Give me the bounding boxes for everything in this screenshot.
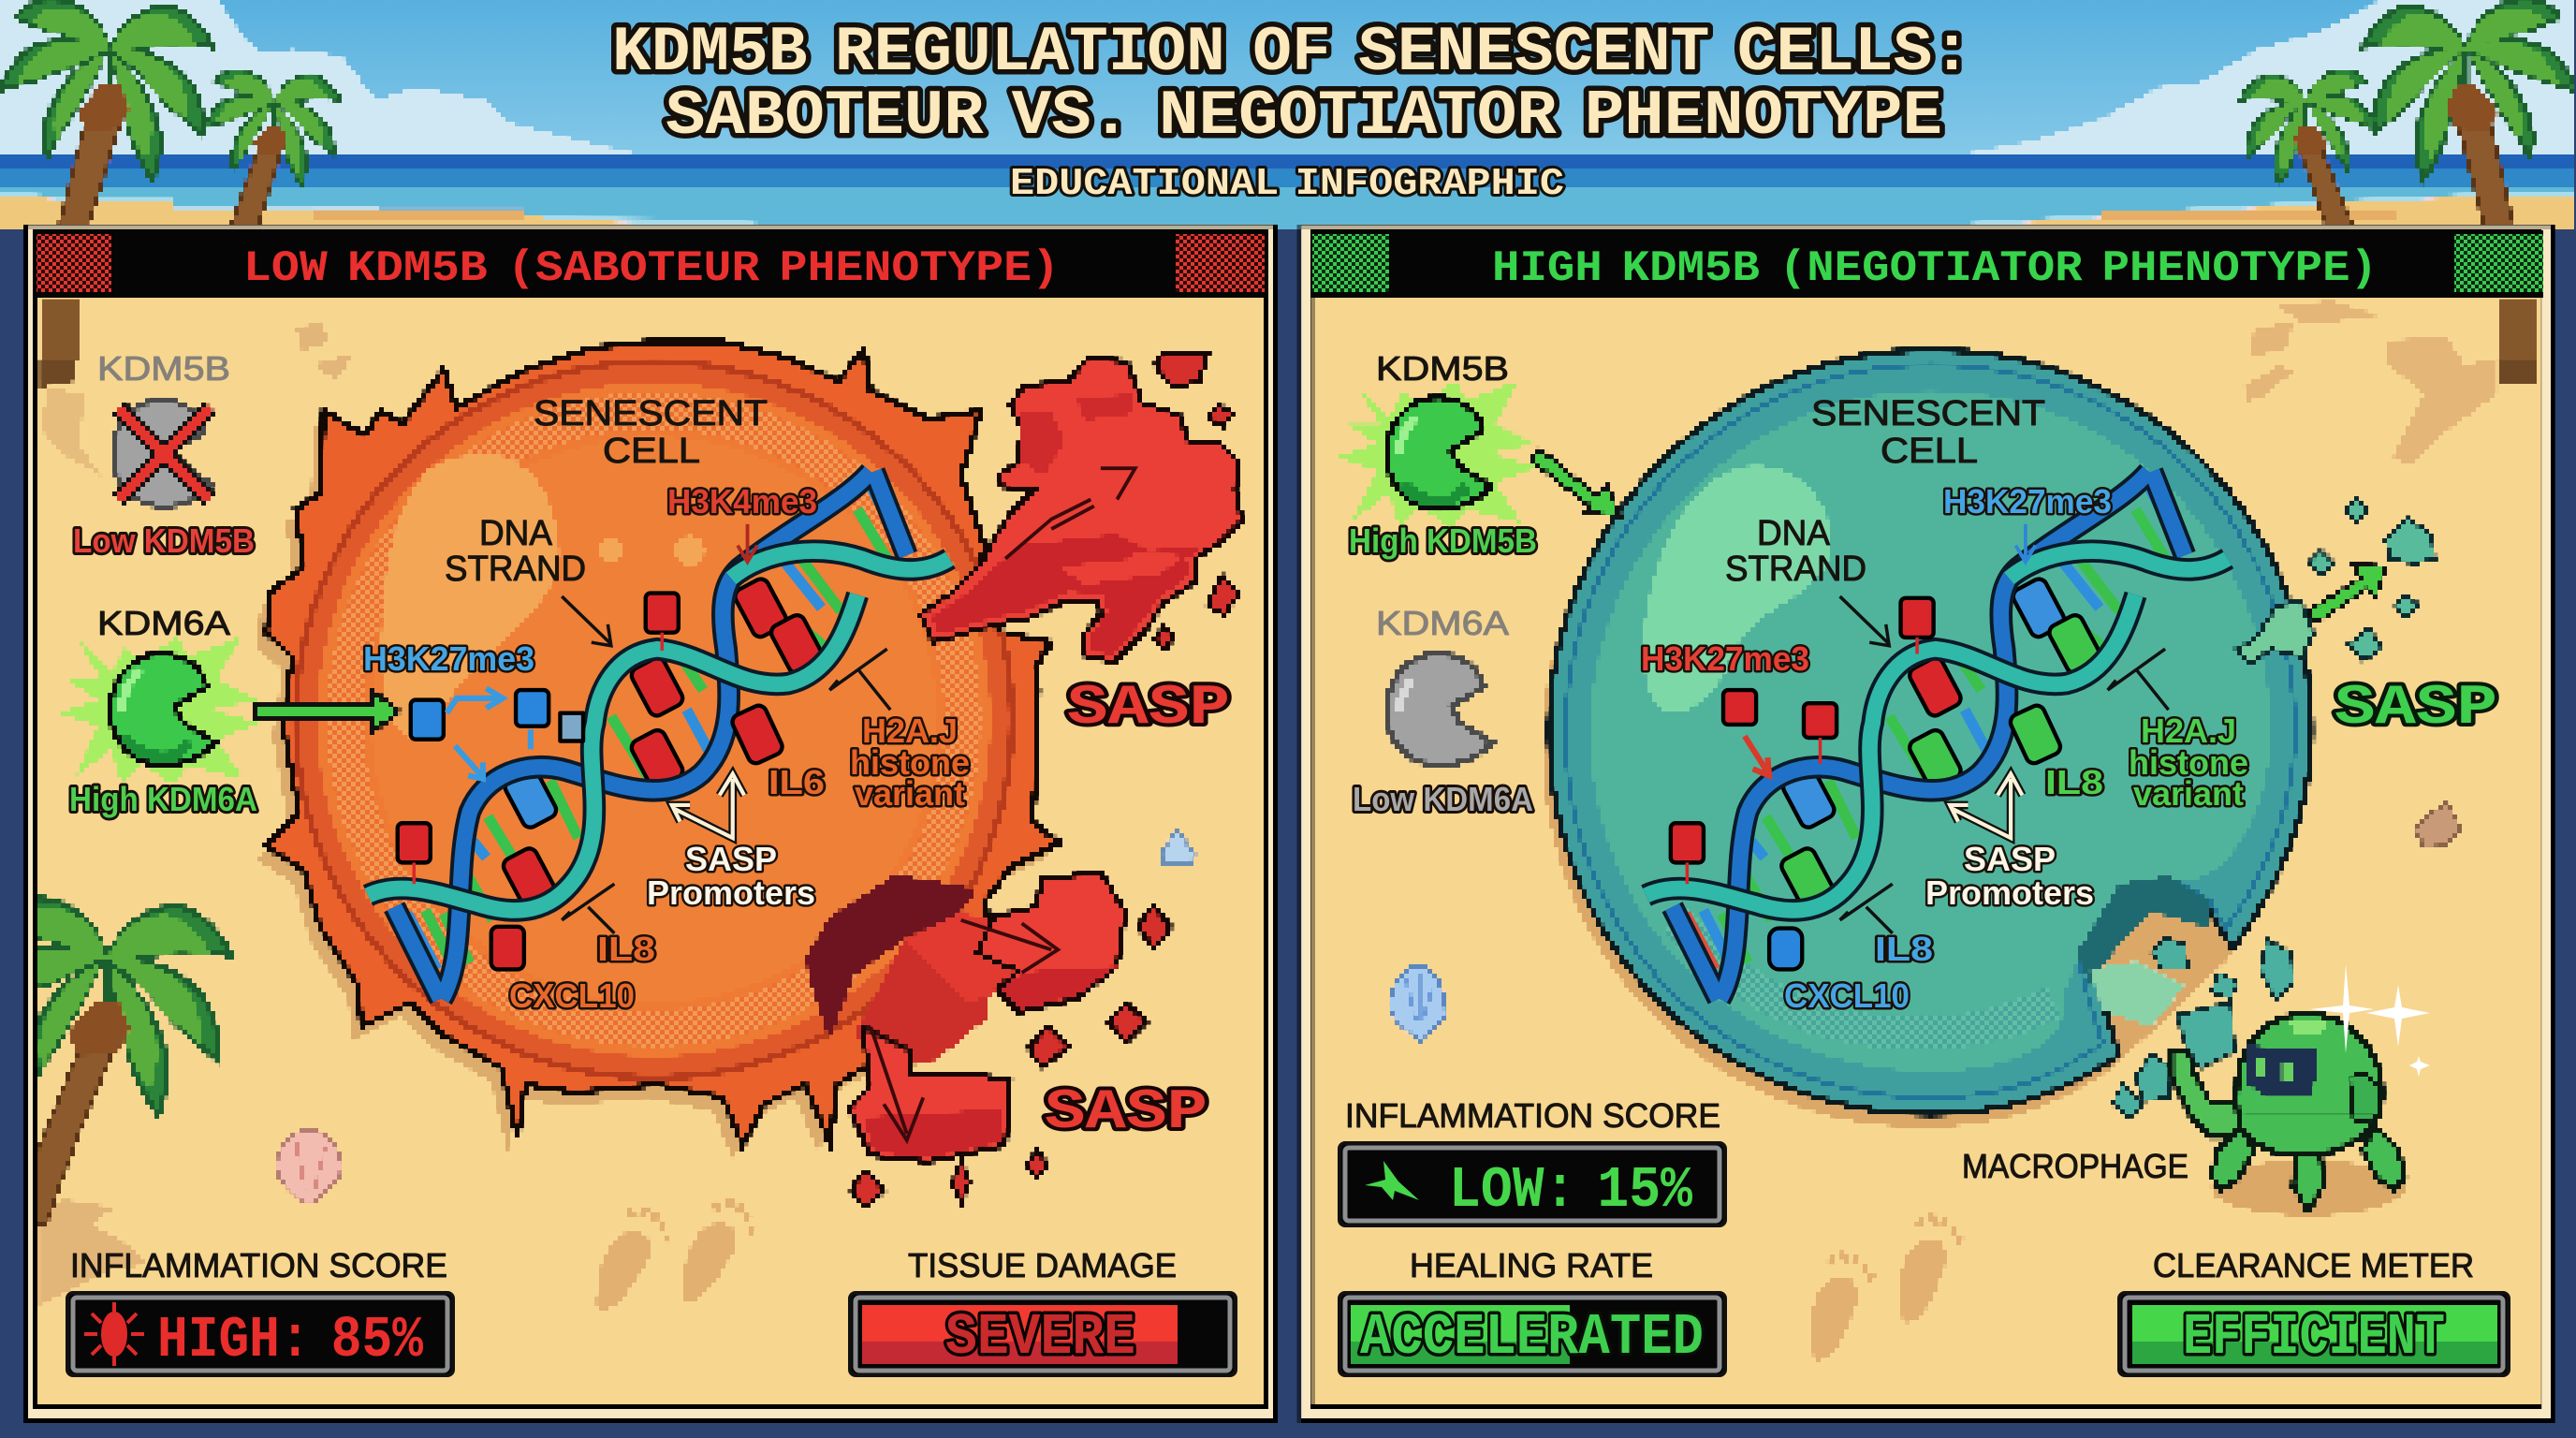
panel frame and sand <box>1301 225 2552 1419</box>
labels inside cell: histone <box>850 743 970 782</box>
promoter arrows <box>1950 774 2022 838</box>
labels inside cell: H3K4me3 <box>667 482 817 521</box>
gauge: inflammation score high: HIGH: 85% <box>157 1307 424 1373</box>
H2A.J bracket <box>829 649 890 710</box>
labels inside cell: IL8 <box>1875 930 1933 968</box>
enzyme: KDM6A high: High KDM6A <box>69 780 257 818</box>
burst arrows <box>871 468 1135 1140</box>
blue pointer <box>2015 524 2035 562</box>
methyl marks: blue and green <box>1769 703 2063 969</box>
senescent cell: spiky orange <box>256 342 1242 1208</box>
enzyme: KDM6A high <box>59 604 399 818</box>
red arrow <box>1745 736 1769 775</box>
title <box>612 17 1971 153</box>
labels inside cell: variant <box>855 774 965 813</box>
labels inside cell: H2A.J <box>2141 712 2236 750</box>
gauge: healing rate <box>1339 1246 1725 1375</box>
enzyme: KDM6A low <box>1353 604 1533 818</box>
labels inside cell: IL6 <box>768 763 825 801</box>
labels inside cell: SASP <box>1964 840 2056 878</box>
SASP burst: lower <box>849 1027 1010 1162</box>
labels inside cell: SENESCENT <box>1811 394 2045 433</box>
enzyme: KDM5B absent <box>73 349 255 560</box>
labels inside cell <box>1641 394 2248 1015</box>
palm: lower left <box>39 1199 148 1306</box>
labels inside cell: STRAND <box>1725 550 1866 589</box>
enzyme: KDM5B high: KDM5B <box>1376 349 1509 388</box>
macrophage robot <box>2172 1014 2405 1211</box>
icon: inflammation virus <box>84 1302 144 1366</box>
gauge: inflammation score high <box>67 1246 453 1375</box>
labels inside cell: IL8 <box>2045 763 2103 801</box>
gauge: clearance meter <box>2119 1246 2509 1375</box>
SASP droplets: top <box>1155 355 1238 649</box>
senescent cell: teal <box>1531 350 2435 1127</box>
notch shade <box>2076 875 2209 986</box>
fragments <box>2089 961 2185 1027</box>
labels inside cell: CXCL10 <box>509 976 635 1015</box>
labels inside cell: DNA <box>479 514 553 553</box>
shell: blue <box>1390 966 1445 1042</box>
labels inside cell: STRAND <box>445 550 586 589</box>
labels inside cell: H3K27me3 <box>363 639 534 678</box>
clouds <box>0 0 2576 154</box>
gauge: healing rate: HEALING RATE <box>1410 1246 1653 1284</box>
label: macrophage: MACROPHAGE <box>1962 1147 2188 1185</box>
base pair rungs <box>1686 486 2182 969</box>
footprints <box>585 1192 763 1324</box>
gauge: healing rate: ACCELERATED <box>1360 1304 1704 1371</box>
secretion: small SASP <box>2237 600 2313 666</box>
SASP burst: top right <box>920 359 1242 662</box>
label: SASP bottom: SASP <box>1045 1081 1208 1145</box>
shell: pink <box>276 1130 342 1203</box>
enzyme: KDM5B high <box>1338 349 1538 560</box>
header title: LOW KDM5B (SABOTEUR PHENOTYPE) <box>243 244 1060 293</box>
IL8 bracket <box>562 884 614 933</box>
labels inside cell <box>363 394 970 1015</box>
shell: brown <box>2415 801 2461 848</box>
labels inside cell: H3K27me3 <box>1943 482 2112 521</box>
blue arrows <box>446 688 531 779</box>
gauge: inflammation score high: INFLAMMATION SCORE <box>70 1246 447 1284</box>
sand <box>0 192 2576 230</box>
title: KDM5B REGULATION OF SENESCENT CELLS: <box>612 17 1971 89</box>
panel: high KDM5B negotiator phenotype <box>1301 225 2552 1419</box>
macrophage shadow <box>2211 1160 2405 1216</box>
sea <box>0 154 2576 230</box>
sparkles <box>2310 964 2430 1077</box>
DNA double helix <box>1647 472 2228 999</box>
gauge: clearance meter: EFFICIENT <box>2183 1304 2445 1371</box>
enzyme: KDM6A high: KDM6A <box>97 604 230 642</box>
arrow: KDM5B to cell <box>1531 448 1619 516</box>
footprints <box>1803 1211 1967 1369</box>
labels inside cell: H3K27me3 <box>1641 639 1809 678</box>
arrow: secretion <box>2308 564 2385 623</box>
labels inside cell: SENESCENT <box>534 394 768 433</box>
title: SABOTEUR VS. NEGOTIATOR PHENOTYPE <box>666 81 1942 153</box>
panel header bar <box>1310 230 2543 298</box>
palm trunks <box>59 109 2513 225</box>
promoter arrows <box>672 774 744 838</box>
IL8 bracket <box>1840 884 1893 933</box>
labels inside cell: CXCL10 <box>1784 976 1910 1015</box>
labels inside cell: histone <box>2129 743 2248 782</box>
panel: low KDM5B saboteur phenotype <box>0 225 1277 1419</box>
gauge: tissue damage: SEVERE <box>945 1304 1135 1371</box>
DNA pointer <box>562 596 611 646</box>
methyl marks: red <box>398 594 784 969</box>
label: SASP: SASP <box>2334 677 2497 741</box>
label: SASP top: SASP <box>1067 677 1230 741</box>
enzyme: KDM5B high: High KDM5B <box>1349 521 1537 560</box>
labels inside cell: variant <box>2133 774 2244 813</box>
base pair rungs <box>407 486 903 969</box>
gauge: inflammation score low: LOW: 15% <box>1449 1157 1693 1224</box>
methyl marks: red <box>1671 598 1934 884</box>
labels inside cell: DNA <box>1757 514 1831 553</box>
labels inside cell: IL8 <box>597 930 655 968</box>
histone capsules <box>501 576 825 909</box>
gauge: tissue damage: TISSUE DAMAGE <box>908 1246 1177 1284</box>
panel frame and sand <box>0 225 1277 1419</box>
gauge: clearance meter: CLEARANCE METER <box>2153 1246 2474 1284</box>
labels inside cell: CELL <box>603 432 700 471</box>
gauge: inflammation score low <box>1339 1096 1725 1225</box>
labels inside cell: Promoters <box>647 873 815 912</box>
enzyme: KDM5B absent: KDM5B <box>97 349 230 388</box>
enzyme: KDM6A low: Low KDM6A <box>1353 780 1533 818</box>
labels inside cell: H2A.J <box>862 712 958 750</box>
H2A.J bracket <box>2108 649 2169 710</box>
methyl marks: blue <box>411 690 583 741</box>
icon: trend down <box>1365 1161 1419 1200</box>
labels inside cell: SASP <box>685 840 777 878</box>
crater: dark wound <box>855 940 994 1068</box>
H3K4me3 pointer <box>738 524 757 562</box>
subtitle: EDUCATIONAL INFOGRAPHIC <box>1010 163 1564 206</box>
DNA pointer <box>1840 596 1889 646</box>
panel header bar <box>37 230 1268 298</box>
gauge: inflammation score low: INFLAMMATION SCORE <box>1345 1096 1720 1135</box>
crystal: pale blue <box>1162 829 1194 864</box>
DNA double helix <box>368 472 949 999</box>
labels inside cell: Promoters <box>1925 873 2094 912</box>
arrow: KDM6A to cell <box>255 690 399 733</box>
SASP burst: right <box>977 873 1125 1012</box>
enzyme: KDM5B absent: Low KDM5B <box>73 521 255 560</box>
gauge: tissue damage <box>850 1246 1236 1375</box>
header title: HIGH KDM5B (NEGOTIATOR PHENOTYPE) <box>1492 244 2378 293</box>
labels inside cell: CELL <box>1881 432 1978 471</box>
histone capsules <box>1778 576 2103 909</box>
enzyme: KDM6A low: KDM6A <box>1376 604 1509 642</box>
